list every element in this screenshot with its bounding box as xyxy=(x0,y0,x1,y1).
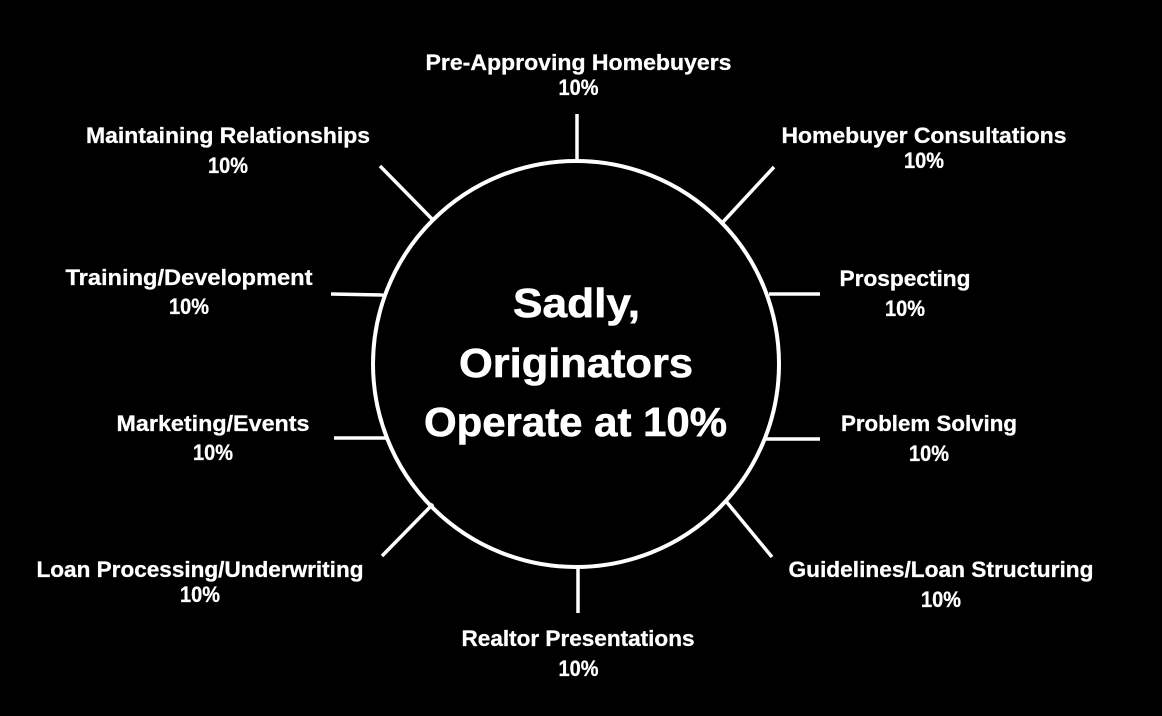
label: prospecting xyxy=(840,266,970,321)
label: homebuyer consultations: Homebuyer Consultations xyxy=(782,123,1066,148)
label: marketing/events: Marketing/Events xyxy=(116,411,310,436)
label: loan processing/underwriting xyxy=(36,557,364,607)
label: marketing/events xyxy=(116,411,310,465)
label: problem solving xyxy=(841,411,1017,466)
label: problem solving: Problem Solving xyxy=(841,411,1017,436)
center title xyxy=(424,280,727,445)
spoke: loan processing xyxy=(382,504,433,556)
central circle xyxy=(373,161,779,567)
label: realtor presentations xyxy=(462,626,694,681)
label: realtor presentations: 10% xyxy=(558,656,598,681)
label: maintaining relationships: Maintaining Relationships xyxy=(86,123,370,148)
spoke: marketing xyxy=(334,436,387,440)
spoke: problem solving xyxy=(765,437,820,441)
spoke: realtor presentations xyxy=(576,565,580,613)
label: marketing/events: 10% xyxy=(193,440,233,465)
label: pre-approving homebuyers xyxy=(426,50,732,100)
label: maintaining relationships xyxy=(86,123,370,178)
label: prospecting: Prospecting xyxy=(840,266,970,291)
label: homebuyer consultations xyxy=(782,123,1066,173)
label: guidelines/loan structuring xyxy=(788,557,1094,612)
center title: Originators xyxy=(459,340,693,386)
label: maintaining relationships: 10% xyxy=(208,153,248,178)
label: prospecting: 10% xyxy=(885,296,925,321)
label: loan processing/underwriting: Loan Processing/Underwriting xyxy=(36,557,364,582)
label: training/development xyxy=(66,265,313,319)
center title: Sadly, xyxy=(513,280,640,326)
label: training/development: Training/Development xyxy=(66,265,313,290)
spoke: training xyxy=(331,294,384,295)
spoke: homebuyer consultations xyxy=(723,167,774,222)
spoke: maintaining relationships xyxy=(380,166,432,219)
spoke: guidelines xyxy=(725,500,772,557)
label: problem solving: 10% xyxy=(909,441,949,466)
label: pre-approving homebuyers: 10% xyxy=(558,75,598,100)
label: realtor presentations: Realtor Presentations xyxy=(462,626,694,651)
label: guidelines/loan structuring: Guidelines/Loan Structuring xyxy=(788,557,1094,582)
spoke: pre-approving homebuyers xyxy=(575,114,579,161)
label: homebuyer consultations: 10% xyxy=(904,148,944,173)
label: pre-approving homebuyers: Pre-Approving Homebuyers xyxy=(426,50,732,75)
spoke: prospecting xyxy=(769,292,820,296)
label: guidelines/loan structuring: 10% xyxy=(921,587,961,612)
label: training/development: 10% xyxy=(169,294,209,319)
center title: Operate at 10% xyxy=(424,399,727,445)
label: loan processing/underwriting: 10% xyxy=(180,582,220,607)
